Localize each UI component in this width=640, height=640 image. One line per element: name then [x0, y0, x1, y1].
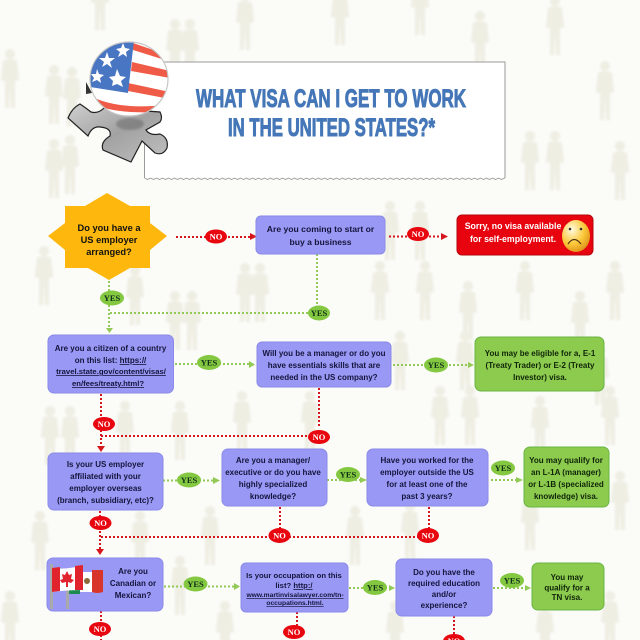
box: education or experience: and/or [432, 590, 456, 599]
connector: manager yes [327, 479, 360, 481]
arrow head: to affiliated question [97, 446, 105, 452]
box: manager or essential skills [257, 342, 391, 387]
label: no, Canadian: NO [94, 624, 107, 634]
arrow head: to business question [250, 233, 257, 240]
label: no, business [407, 227, 429, 241]
box: specialized knowledge: Are you a manager/ [236, 456, 311, 465]
box: occupation on list: list? http:/ [275, 581, 313, 590]
label: no, affiliated [90, 516, 112, 530]
label: yes, skills [424, 358, 448, 372]
label: no, citizen: NO [98, 419, 111, 429]
label: no, worked: NO [422, 530, 435, 540]
box: specialized knowledge: executive or do you have [225, 468, 321, 477]
title [196, 85, 466, 142]
box: worked outside the US: for at least one of the [387, 480, 468, 489]
label: no, affiliated: NO [94, 518, 107, 528]
icon: puzzle piece under flag globe [68, 82, 167, 162]
box: Canadian or Mexican: Canadian or [110, 579, 156, 588]
arrow head: to education question [389, 585, 395, 591]
connector: citizen no [101, 388, 319, 446]
box: specialized knowledge: highly specialized [239, 480, 307, 489]
box: TN visa result: You may [551, 573, 584, 582]
label: yes, employer: YES [104, 293, 121, 303]
label: no, occupation: NO [288, 627, 301, 637]
label: yes, occupation: YES [367, 582, 384, 592]
box: manager or essential skills: have essentials skills that are [268, 361, 381, 370]
box: manager or essential skills: needed in the US company? [270, 373, 378, 382]
box: worked outside the US: employer outside the US [380, 468, 475, 477]
box: occupation on list: occupations.html. [266, 600, 324, 607]
connector: education yes [493, 587, 526, 589]
box: education or experience: Do you have the [413, 568, 475, 577]
box: citizen of treaty country: travel.state.gov/content/visas/ [56, 367, 167, 376]
icon: Canadian and Mexican flags [50, 564, 103, 609]
label: yes, worked [491, 460, 515, 476]
label: no, manager [268, 528, 290, 543]
arrow head: to TN visa [525, 585, 531, 591]
box: affiliated employer [48, 453, 163, 510]
box: start a business [256, 216, 385, 254]
box: specialized knowledge [222, 449, 327, 506]
arrow head: to worked question [360, 477, 367, 483]
label: yes, affiliated: YES [181, 475, 198, 485]
box: affiliated employer: (branch, subsidiary, etc)? [57, 496, 154, 505]
label: no, Canadian [89, 622, 111, 636]
decision star: employer arranged [48, 193, 167, 280]
connector: Canadian yes [164, 586, 234, 588]
label: yes, Canadian: YES [187, 579, 204, 589]
connector: red no row [100, 507, 429, 550]
decision star: employer arranged: arranged? [86, 247, 132, 257]
decision star: employer arranged: US employer [81, 235, 138, 245]
connector: employer no [176, 236, 250, 238]
label: yes, education: YES [504, 576, 521, 586]
label: no, manager: NO [273, 530, 286, 540]
decision star: employer arranged: Do you have a [77, 223, 141, 233]
box: citizen of treaty country: en/fees/treaty.html? [72, 379, 144, 388]
box: manager or essential skills: Will you be a manager or do you [262, 349, 386, 358]
box: Canadian or Mexican: Are you [118, 567, 148, 576]
box: E visa result [475, 337, 604, 391]
label: no, employer [205, 230, 227, 244]
box: citizen of treaty country: Are you a citizen of a country [55, 344, 167, 353]
label: yes, worked: YES [495, 463, 512, 473]
arrow head: to L-1 visa [516, 477, 523, 483]
connector: business no [389, 236, 443, 238]
label: yes, skills: YES [428, 360, 445, 370]
label: no, business: NO [412, 229, 425, 239]
box: affiliated employer: Is your US employer [67, 460, 144, 469]
arrow head: to sorry box [441, 233, 448, 240]
box: worked outside the US: Have you worked for the [381, 456, 474, 465]
title panel [144, 62, 505, 180]
box: citizen of treaty country: on this list: https:// [75, 356, 147, 365]
box: E visa result: You may be eligible for a, E-1 [485, 349, 596, 358]
icon: US flag globe [88, 40, 170, 118]
box: start a business: buy a business [289, 237, 352, 247]
box: sorry no visa [457, 215, 593, 255]
label: no, skills: NO [313, 432, 326, 442]
label: yes, business: YES [311, 308, 328, 318]
box: education or experience [396, 559, 492, 616]
box: L-1 visa result: an L-1A (manager) [531, 468, 601, 477]
arrow head: to manager question [249, 361, 255, 368]
box: education or experience: experience? [421, 601, 467, 610]
arrow head: to occupation question [234, 583, 240, 590]
label: yes, citizen [197, 355, 221, 370]
box: sorry no visa: Sorry, no visa available [465, 221, 561, 231]
box: TN visa result [532, 563, 604, 610]
label: no, occupation [283, 625, 305, 639]
icon: sad face [562, 220, 590, 252]
box: L-1 visa result [524, 447, 609, 507]
label: yes, Canadian [184, 576, 208, 592]
box: occupation on list: www.martinvisalawyer.com/tn- [245, 592, 344, 599]
box: TN visa result: qualify for a [544, 584, 590, 592]
label: yes, affiliated [177, 472, 201, 488]
label: yes, employer [100, 290, 124, 306]
box: occupation on list: Is your occupation on this [246, 571, 342, 580]
connector arrow: down to citizen box [106, 328, 113, 333]
connector: worked yes [491, 479, 517, 481]
label: yes, business [308, 306, 330, 320]
box: specialized knowledge: knowledge? [250, 492, 296, 501]
connector: essential skills yes [393, 364, 468, 366]
connector: citizen yes [175, 363, 250, 365]
label: no, skills [308, 430, 330, 444]
label: no, employer: NO [210, 232, 223, 242]
label: yes, manager: YES [340, 470, 357, 480]
box: affiliated employer: affiliated with your [70, 472, 141, 481]
connector: bottom no lines [101, 611, 454, 640]
box: start a business: Are you coming to start or [267, 224, 375, 234]
box: E visa result: (Treaty Trader) or E-2 (Treaty [486, 361, 595, 370]
box: occupation on list [241, 563, 348, 612]
box: worked outside the US [367, 449, 488, 506]
arrow head: to E visa [468, 362, 474, 368]
arrow head: to Canadian question [96, 549, 104, 555]
box: L-1 visa result: knowledge) visa. [534, 492, 598, 501]
box: Canadian or Mexican [47, 558, 163, 611]
box: TN visa result: TN visa. [552, 593, 582, 602]
box: citizen of treaty country [48, 335, 174, 393]
label: no, worked [417, 528, 439, 543]
box: worked outside the US: past 3 years? [401, 492, 453, 501]
label: yes, manager [336, 467, 360, 482]
label: yes, education [500, 573, 524, 588]
label: yes, citizen: YES [201, 358, 218, 368]
connector: affiliated yes [163, 480, 214, 482]
box: affiliated employer: employer overseas [69, 484, 142, 493]
box: E visa result: Investor) visa. [513, 373, 567, 382]
title: IN THE UNITED STATES?* [228, 114, 435, 142]
box: Canadian or Mexican: Mexican? [115, 591, 151, 600]
box: L-1 visa result: or L-1B (specialized [528, 480, 604, 489]
box: sorry no visa: for self-employment. [470, 234, 556, 244]
connector: employer yes [109, 254, 317, 331]
arrow head: to specialized question [213, 477, 220, 484]
box: L-1 visa result: You may qualify for [529, 456, 603, 465]
label: yes, occupation [363, 580, 387, 595]
label: no, education [443, 634, 465, 640]
connector: occupation yes [349, 587, 390, 589]
label: no, citizen [93, 417, 115, 431]
title: WHAT VISA CAN I GET TO WORK [196, 85, 466, 113]
box: education or experience: required education [408, 579, 480, 588]
